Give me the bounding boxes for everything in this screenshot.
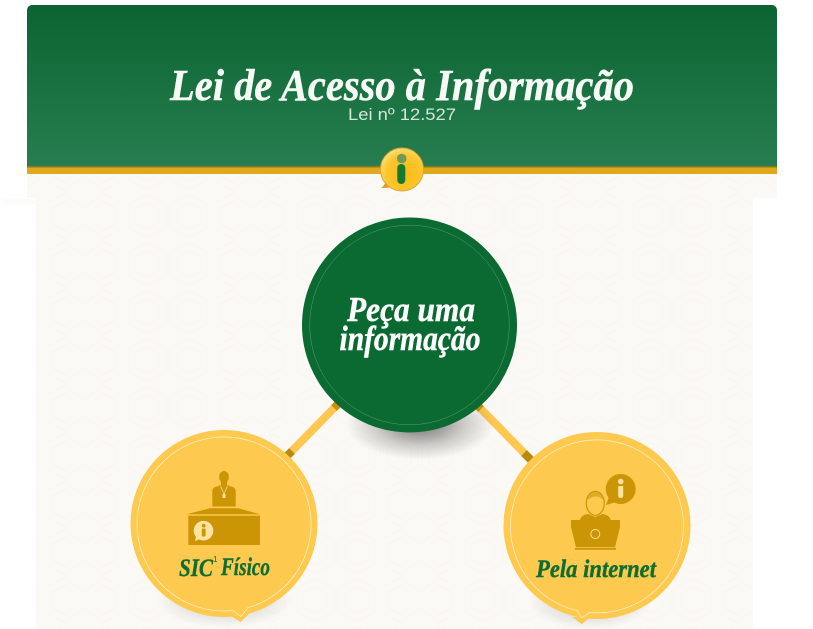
icon: person with laptop [571,474,636,550]
shadow: left circle [157,572,293,628]
panel: SIC Físico [130,430,318,622]
label: SIC Físico [179,554,270,582]
heading: Peça uma informação: Peça uma [346,290,475,329]
panel: Pela internet [504,432,690,624]
label: SIC Físico: 1 [213,555,218,564]
header banner [27,5,777,174]
connector: right [477,405,532,461]
label: SIC Físico: SIC [179,555,213,582]
label: SIC Físico: Físico [220,554,270,581]
panel: center circle [302,218,517,432]
connector: left [286,403,339,457]
shadow: center circle [346,388,494,460]
heading: Peça uma informação: informação [340,319,480,358]
heading: Peça uma informação [340,290,480,358]
page background panel [3,174,777,629]
icon: information speech bubble [380,148,424,191]
icon: attendant at desk [187,471,260,545]
shadow: right circle [528,574,652,629]
label: Pela internet: Pela internet [535,556,657,583]
subtitle: Lei nº 12.527 [348,105,456,124]
title: Lei de Acesso à Informação [169,61,634,110]
